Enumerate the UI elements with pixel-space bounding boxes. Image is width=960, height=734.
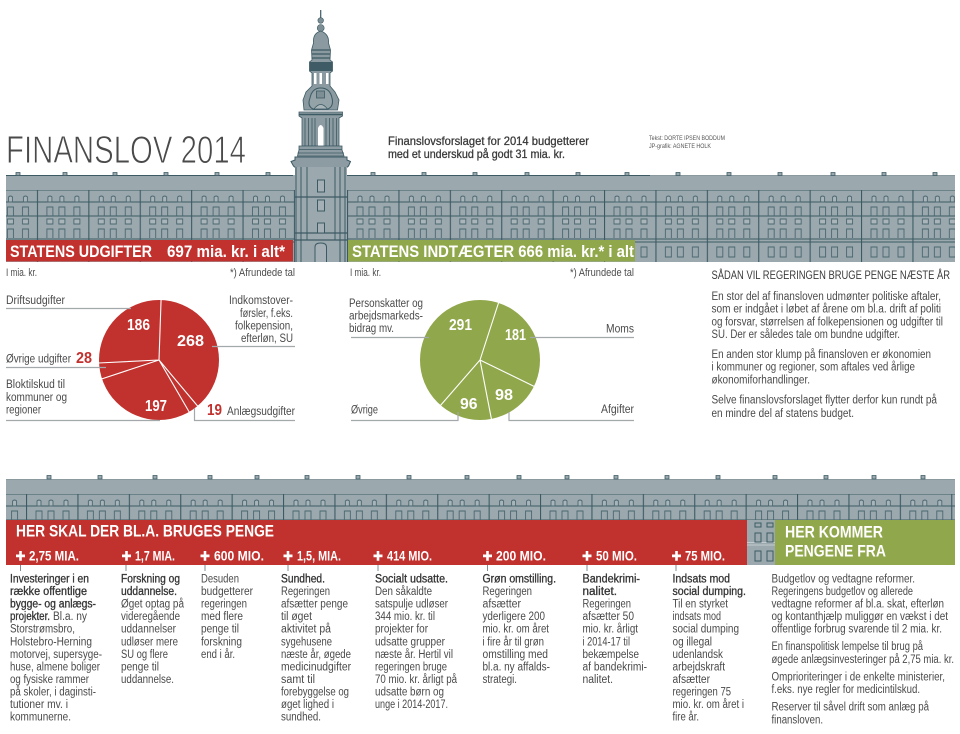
column: grøn omstilling	[482, 574, 556, 686]
label: 98 afgifter: Afgifter	[601, 404, 634, 416]
column: sundhed: medicinudgifter	[281, 661, 351, 673]
column: her kommer pengene fra text: Budgetlov og vedtagne reformer.	[772, 574, 915, 586]
column: socialt udsatte	[375, 574, 458, 711]
amount: 414 mio.: 414 MIO.	[387, 549, 432, 564]
column: sundhed: aktivitet på	[281, 624, 332, 636]
column: social dumping: udenlandsk	[672, 649, 723, 661]
amount: 600 mio.: 600 MIO.	[214, 549, 264, 564]
column: sundhed: sygehusene	[281, 636, 332, 648]
column: grøn omstilling: i fire år til grøn	[482, 636, 544, 648]
column: investeringer: og fysiske rammer	[10, 674, 89, 686]
header bar: her kommer pengene fra	[775, 520, 955, 565]
column: investeringer: bygge- og anlægs-	[10, 599, 96, 611]
pie: income	[420, 300, 540, 420]
column: sundhed	[281, 574, 351, 724]
column: grøn omstilling: Regeringen	[482, 586, 532, 598]
label: 28 øvrige udgifter: Øvrige udgifter	[6, 354, 71, 366]
column: forskning og uddannelse: uddannelser	[121, 624, 176, 636]
panel: sådan vil regeringen bruge penge	[712, 269, 950, 420]
column: investeringer: kommunerne.	[10, 712, 71, 724]
column: bandekriminalitet: af bandekrimi-	[582, 661, 647, 673]
column: socialt udsatte: projekter for	[375, 624, 428, 636]
intro text	[388, 134, 589, 161]
column: forskning og uddannelse	[121, 574, 185, 686]
label: 197 bloktilskud	[6, 379, 167, 416]
label: 181 moms	[505, 324, 634, 344]
column: social dumping: afsætter	[672, 674, 710, 686]
column: social dumping: fire år.	[672, 712, 699, 724]
column: sundhed: til øget	[281, 611, 313, 623]
column: socialt udsatte: 70 mio. kr. årligt på	[375, 674, 458, 686]
column: grøn omstilling: omstilling med	[482, 649, 548, 661]
label: 181 moms: Moms	[606, 324, 634, 336]
column: investeringer	[10, 574, 102, 724]
credits	[649, 135, 725, 150]
column: bandekriminalitet: Regeringen	[582, 599, 631, 611]
unit note: I mia. kr.	[6, 267, 37, 279]
header bar: her kommer pengene fra: PENGENE FRA	[785, 542, 886, 561]
column: socialt udsatte: satspulje udløser	[375, 599, 448, 611]
column: investeringer: projekter.	[10, 611, 50, 623]
column: grøn omstilling: Grøn omstilling.	[482, 574, 556, 586]
panel: udgifter pie chart	[6, 267, 295, 420]
amount: 75 mio.	[672, 549, 725, 564]
amount: 1,7 mia.	[122, 549, 175, 564]
column: desuden budgetterer: forskning	[201, 636, 242, 648]
paragraph 3	[712, 395, 938, 420]
column: socialt udsatte: udsatte børn og	[375, 686, 444, 698]
column: forskning og uddannelse: uddannelse.	[121, 586, 177, 598]
panel: indtægter pie chart	[349, 267, 634, 420]
label: 291 personskatter: 291	[449, 317, 472, 334]
intro text: med et underskud på godt 31 mia. kr.	[388, 147, 565, 161]
column: investeringer: Bl.a. ny	[53, 611, 87, 623]
column: social dumping	[672, 574, 746, 724]
illustration: top building facade	[6, 172, 955, 262]
column: social dumping: Til en styrket	[672, 599, 729, 611]
paragraph 1	[712, 291, 943, 341]
column: bandekriminalitet	[582, 574, 647, 686]
column: her kommer pengene fra text	[772, 574, 954, 726]
column: sundhed: samt til	[281, 674, 315, 686]
column: desuden budgetterer: penge til	[201, 624, 239, 636]
label: 186 driftsudgifter: 186	[127, 317, 150, 334]
label: 268 indkomstoverførsler: efterløn, SU	[241, 333, 293, 345]
label: 291 personskatter: bidrag mv.	[349, 323, 394, 335]
illustration: church tower	[291, 10, 350, 262]
amount: 75 mio.: 75 MIO.	[685, 549, 725, 564]
illustration: gray facade block between bars	[747, 520, 775, 565]
column: investeringer: Holstebro-Herning	[10, 636, 92, 648]
column: desuden budgetterer: end i år.	[201, 649, 235, 661]
column: sundhed: næste år, øgede	[281, 649, 351, 661]
label: 291 personskatter	[349, 298, 472, 335]
amount: 1,5 mia.: 1,5, MIA.	[297, 549, 341, 564]
column: desuden budgetterer: med flere	[201, 611, 243, 623]
paragraph 2: økonomiforhandlinger.	[712, 374, 810, 386]
column: social dumping: indsats mod	[672, 611, 721, 623]
column: sundhed: sundhed.	[281, 712, 321, 724]
column: social dumping: regeringen 75	[672, 686, 731, 698]
column: socialt udsatte: Socialt udsatte.	[375, 574, 448, 586]
column: desuden budgetterer: Desuden	[201, 574, 239, 586]
pie: expenses	[98, 299, 219, 420]
amount: 50 mio.	[582, 549, 637, 564]
header bar: her skal der bruges penge: HER SKAL DER BL.A. BRUGES PENGE	[16, 522, 274, 541]
amount: 2,75 mia.: 2,75 MIA.	[29, 549, 79, 564]
column: investeringer: huse, almene boliger	[10, 661, 100, 673]
label: 19 anlægsudgifter	[207, 402, 295, 419]
column: social dumping: mio. kr. om året i	[672, 699, 744, 711]
column: her kommer pengene fra text: Reserver til såvel drift som anlæg på	[772, 702, 929, 714]
column: investeringer: motorvej, supersyge-	[10, 649, 102, 661]
header bar: statens udgifter: 697 mia. kr. i alt*	[167, 242, 285, 261]
label: 197 bloktilskud: kommuner og	[6, 392, 67, 404]
label: 268 indkomstoverførsler: folkepension,	[235, 320, 293, 332]
paragraph 2	[712, 349, 931, 386]
column: bandekriminalitet: nalitet.	[582, 674, 613, 686]
amount: 50 mio.: 50 MIO.	[596, 549, 637, 564]
header bar: her kommer pengene fra: HER KOMMER	[785, 523, 883, 542]
column: sundhed: afsætter penge	[281, 599, 348, 611]
column: investeringer: Storstrømsbro,	[10, 624, 75, 636]
label: 291 personskatter: arbejdsmarkeds-	[349, 310, 423, 322]
column: grøn omstilling: afsætter	[482, 599, 521, 611]
amount: 1,5 mia.	[284, 549, 341, 564]
column: bandekriminalitet: Bandekrimi-	[582, 574, 640, 586]
header bar: statens indtægter: STATENS INDTÆGTER 666 mia. kr.* i alt	[352, 242, 634, 261]
rounding note: *) Afrundede tal	[230, 267, 295, 279]
amount: 1,7 mia.: 1,7 MIA.	[135, 549, 175, 564]
header bar: statens udgifter	[6, 240, 293, 262]
label: 268 indkomstoverførsler: 268	[177, 333, 204, 350]
column: forskning og uddannelse: udløser mere	[121, 636, 178, 648]
header bar: her skal der bruges penge	[6, 520, 747, 565]
label: 268 indkomstoverførsler	[177, 295, 293, 350]
column: socialt udsatte: 344 mio. kr. til	[375, 611, 435, 623]
column: socialt udsatte: udsatte grupper	[375, 636, 445, 648]
illustration: lower building facade	[6, 476, 955, 565]
column: grøn omstilling: yderligere 200	[482, 611, 545, 623]
column: her kommer pengene fra text: f.eks. nye regler for medicintilskud.	[772, 684, 920, 696]
column: investeringer: Investeringer i en	[10, 574, 89, 586]
column: grøn omstilling: strategi.	[482, 674, 517, 686]
paragraph 2: i kommuner og regioner, som aftales ved årlige	[712, 362, 915, 374]
column: grøn omstilling: bl.a. ny affalds-	[482, 661, 550, 673]
column: forskning og uddannelse: videregående	[121, 611, 180, 623]
label: 181 moms: 181	[505, 327, 526, 344]
column: forskning og uddannelse: Forskning og	[121, 574, 180, 586]
column: social dumping: social dumping	[672, 624, 739, 636]
column: her kommer pengene fra text: En finanspolitisk lempelse til brug på	[772, 641, 923, 653]
credits: JP-grafik: AGNETE HOLK	[649, 143, 712, 150]
column: social dumping: og illegal	[672, 636, 712, 648]
paragraph 1: SU. Der er således tale om bundne udgifter.	[712, 329, 900, 341]
column: social dumping: arbejdskraft	[672, 661, 726, 673]
column: investeringer: række offentlige	[10, 586, 87, 598]
intro text: Finanslovsforslaget for 2014 budgetterer	[388, 134, 589, 148]
paragraph 3: en mindre del af statens budget.	[712, 408, 854, 420]
column: grøn omstilling: mio. kr. om året	[482, 624, 550, 636]
column: bandekriminalitet: i 2014-17 til	[582, 636, 630, 648]
rounding note: *) Afrundede tal	[570, 267, 634, 279]
unit note: I mia. kr.	[350, 267, 381, 279]
header bar: statens udgifter: STATENS UDGIFTER	[10, 242, 152, 261]
label: 197 bloktilskud: Bloktilskud til	[6, 379, 65, 391]
column: investeringer: tutioner mv. i	[10, 699, 68, 711]
credits: Tekst: DORTE IPSEN BODDUM	[649, 135, 725, 142]
column: forskning og uddannelse: Øget optag på	[121, 599, 185, 611]
column: sundhed: Sundhed.	[281, 574, 325, 586]
column: desuden budgetterer: regeringen	[201, 599, 247, 611]
label: 197 bloktilskud: 197	[145, 398, 167, 415]
label: 28 øvrige udgifter	[6, 350, 92, 367]
column: social dumping: social dumping.	[672, 586, 746, 598]
column: bandekriminalitet: bekæmpelse	[582, 649, 639, 661]
column: bandekriminalitet: afsætter 50	[582, 611, 634, 623]
label: 197 bloktilskud: regioner	[6, 404, 41, 416]
column: sundhed: forebyggelse og	[281, 686, 349, 698]
column: bandekriminalitet: mio. kr. årligt	[582, 624, 639, 636]
column: investeringer: på skoler, i daginsti-	[10, 686, 96, 698]
column: sundhed: øget lighed i	[281, 699, 334, 711]
column: socialt udsatte: Den såkaldte	[375, 586, 432, 598]
amount: 414 mio.	[374, 549, 432, 564]
label: 19 anlægsudgifter: 19	[207, 402, 222, 419]
column: forskning og uddannelse: SU og flere	[121, 649, 168, 661]
column: socialt udsatte: næste år. Hertil vil	[375, 649, 453, 661]
label: 291 personskatter: Personskatter og	[349, 298, 423, 310]
leader lines	[351, 338, 634, 420]
amount: 2,75 mia.	[16, 549, 79, 564]
column: socialt udsatte: regeringen bruge	[375, 661, 447, 673]
label: 28 øvrige udgifter: 28	[76, 350, 92, 367]
label: 98 afgifter: 98	[495, 387, 513, 404]
amount: 200 mio.: 200 MIO.	[496, 549, 546, 564]
column: social dumping: Indsats mod	[672, 574, 730, 586]
label: 268 indkomstoverførsler: Indkomstover-	[229, 295, 293, 307]
label: 186 driftsudgifter	[6, 295, 150, 334]
column: her kommer pengene fra text: finansloven.	[772, 714, 823, 726]
label: 98 afgifter	[495, 387, 634, 416]
title: FINANSLOV 2014	[6, 129, 246, 172]
column: forskning og uddannelse: penge til	[121, 661, 159, 673]
column: desuden budgetterer	[201, 574, 253, 661]
label: øvrige: Øvrige	[351, 404, 378, 416]
label: 186 driftsudgifter: Driftsudgifter	[6, 295, 65, 307]
label: 96 øvrige: 96	[460, 396, 478, 413]
column: bandekriminalitet: nalitet.	[582, 586, 617, 598]
label: 268 indkomstoverførsler: førsler, f.eks.	[240, 308, 293, 320]
leader lines	[6, 308, 295, 420]
column: socialt udsatte: unge i 2014-2017.	[375, 699, 448, 711]
column: sundhed: Regeringen	[281, 586, 330, 598]
column: her kommer pengene fra text: Regeringens budgetlov og allerede	[772, 586, 913, 598]
column: desuden budgetterer: budgetterer	[201, 586, 253, 598]
label: 19 anlægsudgifter: Anlægsudgifter	[227, 406, 295, 418]
column: forskning og uddannelse: uddannelse.	[121, 674, 174, 686]
